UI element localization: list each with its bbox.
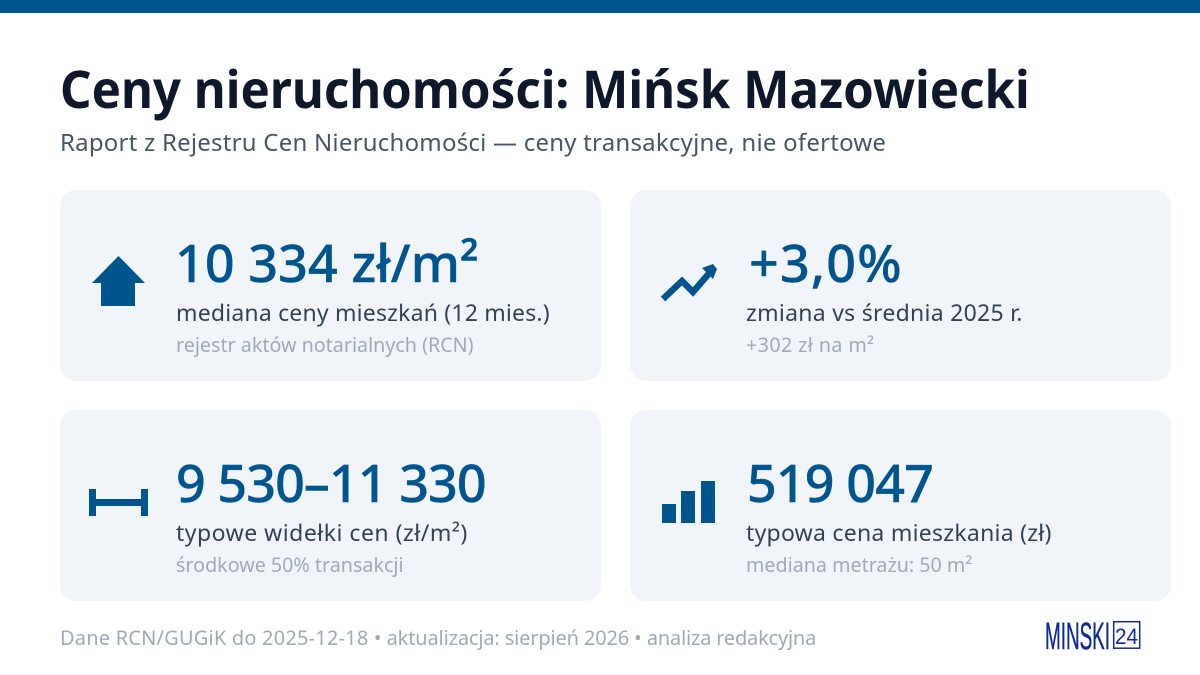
label: typical price: typowa cena mieszkania (zł) xyxy=(746,516,1052,548)
note: typical price: mediana metrażu: 50 m² xyxy=(746,551,972,578)
panel: change xyxy=(630,190,1171,381)
panel: median price xyxy=(60,190,601,381)
icon: house xyxy=(92,256,145,306)
value: price range: 9 530–11 330 xyxy=(176,447,486,518)
panel: price range xyxy=(60,410,601,601)
logo: Minski24: 24 xyxy=(1115,624,1138,649)
icon: trend arrow xyxy=(660,264,717,302)
panel: typical price xyxy=(630,410,1171,601)
label: median price: mediana ceny mieszkań (12 mies.) xyxy=(176,296,550,328)
top bar xyxy=(0,0,1200,13)
icon: bar chart xyxy=(662,481,715,523)
icon: range bracket xyxy=(89,489,148,516)
label: price range: typowe widełki cen (zł/m²) xyxy=(176,516,468,548)
subtitle: Raport z Rejestru Cen Nieruchomości — ceny transakcyjne, nie ofertowe xyxy=(60,126,886,159)
value: change: +3,0% xyxy=(749,227,903,298)
note: price range: środkowe 50% transakcji xyxy=(176,551,404,578)
value: typical price: 519 047 xyxy=(747,447,933,518)
note: change: +302 zł na m² xyxy=(746,331,874,358)
note: median price: rejestr aktów notarialnych (RCN) xyxy=(176,331,474,358)
title: Ceny nieruchomości: Mińsk Mazowiecki xyxy=(60,53,1030,124)
label: change: zmiana vs średnia 2025 r. xyxy=(746,296,1023,328)
footer source: Dane RCN/GUGiK do 2025-12-18 • aktualizacja: sierpień 2026 • analiza redakcyjna xyxy=(60,624,816,651)
value: median price: 10 334 zł/m² xyxy=(175,227,479,298)
